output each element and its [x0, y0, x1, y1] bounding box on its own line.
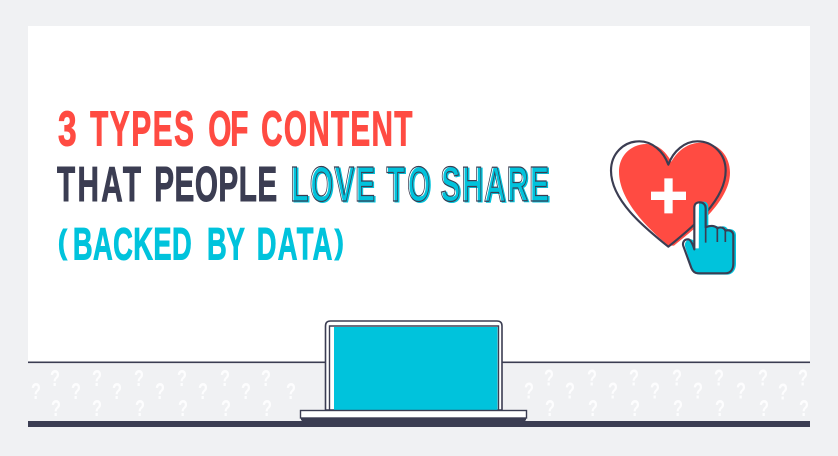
question mark pattern left: ?: [135, 395, 145, 421]
highlighted words: love to share: TO: [388, 157, 432, 213]
question mark pattern right: ?: [759, 395, 769, 421]
highlighted words: love to share: SHARE: [440, 156, 549, 212]
question mark pattern right: ?: [778, 378, 788, 404]
question mark pattern right: ?: [630, 395, 640, 421]
question mark pattern right: ?: [545, 395, 555, 421]
question mark pattern left: ?: [134, 365, 144, 391]
title line 1: OF: [208, 101, 248, 156]
title line 3: (: [58, 223, 68, 260]
title line 2: PEOPLE: [154, 156, 277, 212]
white panel: [28, 26, 810, 362]
floor band: [28, 362, 810, 427]
title line 1: TYPES: [90, 101, 194, 156]
question mark pattern left: ?: [261, 365, 271, 391]
question mark pattern left: ?: [92, 395, 102, 421]
question mark pattern left: [31, 365, 296, 421]
question mark pattern left: ?: [198, 378, 208, 404]
title line 3: ): [335, 223, 344, 260]
title line 2: [57, 156, 277, 212]
hand outline: [683, 202, 733, 273]
question mark pattern right: ?: [565, 378, 575, 404]
highlighted words: love to share: LOVE: [292, 157, 377, 213]
question mark pattern right: ?: [608, 378, 618, 404]
laptop: [300, 321, 526, 427]
question mark pattern left: ?: [241, 378, 251, 404]
question mark pattern right: [524, 364, 809, 421]
question mark pattern left: ?: [92, 365, 102, 391]
title line 3: DATA: [257, 218, 332, 269]
title line 1: 3: [58, 101, 77, 156]
question mark pattern right: ?: [714, 364, 724, 390]
highlighted words: love to share: TO: [386, 156, 430, 212]
question mark pattern left: ?: [50, 365, 60, 391]
question mark pattern left: ?: [286, 378, 296, 404]
question mark pattern left: ?: [178, 395, 188, 421]
question mark pattern right: ?: [629, 364, 639, 390]
question mark pattern right: ?: [544, 364, 554, 390]
laptop base shadow: [301, 418, 526, 427]
title line 3: BY: [207, 218, 245, 269]
question mark pattern left: ?: [112, 378, 122, 404]
heart outline: [611, 141, 726, 247]
laptop lid: [326, 321, 502, 410]
question mark pattern right: ?: [715, 395, 725, 421]
title line 1: [58, 101, 412, 156]
question mark pattern left: ?: [220, 365, 230, 391]
question mark pattern left: ?: [71, 378, 81, 404]
heart fill: [619, 143, 730, 246]
question mark pattern left: ?: [31, 378, 41, 404]
highlighted words: love to share: SHARE: [442, 157, 551, 213]
highlighted words: love to share: [290, 156, 550, 213]
question mark pattern right: ?: [588, 395, 598, 421]
icon: heart with pointing hand: [611, 141, 736, 275]
laptop screen frame: [330, 326, 498, 410]
hand white highlight: [695, 202, 699, 248]
question mark pattern right: ?: [799, 395, 809, 421]
question mark pattern left: ?: [155, 378, 165, 404]
question mark pattern left: ?: [177, 365, 187, 391]
white cross: [651, 178, 686, 213]
laptop screen: [334, 327, 498, 410]
finger lines: [706, 227, 725, 243]
question mark pattern right: ?: [650, 378, 660, 404]
question mark pattern left: ?: [221, 395, 231, 421]
question mark pattern right: ?: [524, 378, 534, 404]
question mark pattern right: ?: [798, 364, 808, 390]
question mark pattern right: ?: [693, 378, 703, 404]
title line 1: CONTENT: [261, 101, 412, 156]
question mark pattern right: ?: [587, 364, 597, 390]
laptop base: [300, 410, 526, 418]
question mark pattern left: ?: [51, 395, 61, 421]
question mark pattern right: ?: [758, 364, 768, 390]
title line 3: BACKED: [73, 218, 192, 269]
question mark pattern right: ?: [672, 364, 682, 390]
question mark pattern right: ?: [736, 378, 746, 404]
title line 2: THAT: [57, 156, 141, 212]
title line 3: [58, 218, 344, 269]
highlighted words: love to share: LOVE: [290, 156, 375, 212]
question mark pattern right: ?: [673, 395, 683, 421]
hand cyan fill: [685, 202, 736, 275]
question mark pattern left: ?: [262, 395, 272, 421]
